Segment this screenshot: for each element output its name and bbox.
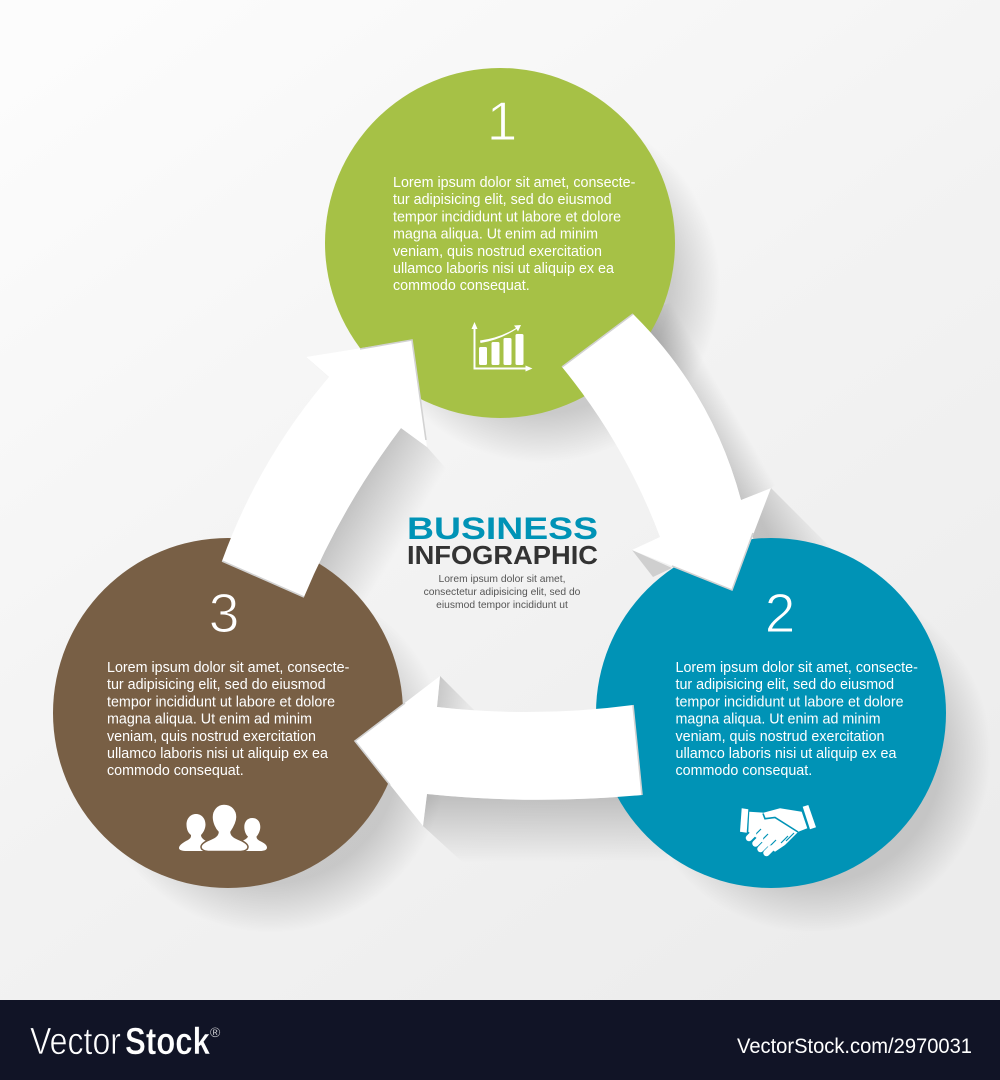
text block 1: ullamco laboris nisi ut aliquip ex ea — [393, 261, 614, 277]
arrow: step 3 to step 1 — [222, 340, 427, 597]
heading: business infographic: INFOGRAPHIC — [407, 540, 598, 570]
center text: consectetur adipisicing elit, sed do — [424, 587, 581, 598]
text block 1: commodo consequat. — [393, 278, 530, 294]
text block 2 — [676, 660, 918, 779]
text block 2: veniam, quis nostrud exercitation — [676, 729, 885, 745]
heading: business infographic: BUSINESS — [407, 510, 598, 546]
text block 2: commodo consequat. — [676, 763, 812, 779]
text block 1: tempor incididunt ut labore et dolore — [393, 209, 621, 225]
footer id: VectorStock.com/2970031 — [737, 1035, 972, 1058]
panel: step 1 green circle — [325, 68, 675, 418]
text block 2: tempor incididunt ut labore et dolore — [676, 694, 904, 710]
center text: Lorem ipsum dolor sit amet, — [438, 574, 566, 585]
text block 2: tur adipisicing elit, sed do eiusmod — [676, 677, 894, 693]
footer logo: Vector — [30, 1021, 121, 1063]
center text: eiusmod tempor incididunt ut — [436, 600, 568, 611]
text block 3: tur adipisicing elit, sed do eiusmod — [107, 677, 326, 693]
text block 3: veniam, quis nostrud exercitation — [107, 729, 316, 745]
text block 1: veniam, quis nostrud exercitation — [393, 244, 602, 260]
number 1: 1 — [487, 90, 517, 152]
text block 3: commodo consequat. — [107, 763, 244, 779]
panel: step 3 brown circle — [53, 538, 403, 888]
footer logo — [30, 1021, 221, 1063]
text block 3: magna aliqua. Ut enim ad minim — [107, 712, 312, 728]
text block 1: magna aliqua. Ut enim ad minim — [393, 227, 598, 243]
footer bar — [0, 1000, 1000, 1080]
arrow: step 1 to step 2 — [562, 314, 771, 590]
number 3: 3 — [209, 582, 239, 644]
text block 2: magna aliqua. Ut enim ad minim — [676, 712, 881, 728]
text block 3: Lorem ipsum dolor sit amet, consecte- — [107, 660, 350, 676]
heading: business infographic — [407, 510, 598, 570]
text block 3 — [107, 660, 350, 779]
panel: step 2 blue circle — [596, 538, 946, 888]
text block 2: ullamco laboris nisi ut aliquip ex ea — [676, 746, 896, 762]
icon: bar chart — [472, 322, 532, 372]
icon: people — [179, 804, 267, 852]
text block 1: tur adipisicing elit, sed do eiusmod — [393, 192, 612, 208]
text block 2: Lorem ipsum dolor sit amet, consecte- — [676, 660, 918, 676]
text block 1: Lorem ipsum dolor sit amet, consecte- — [393, 175, 636, 191]
icon: handshake — [740, 805, 816, 856]
text block 3: tempor incididunt ut labore et dolore — [107, 694, 335, 710]
center text — [424, 574, 581, 611]
arrow shadows — [304, 300, 835, 880]
arrow: step 2 to step 3 — [355, 676, 642, 826]
footer logo: Stock — [125, 1021, 211, 1063]
footer logo: ® — [210, 1024, 221, 1040]
circle shadows — [92, 107, 991, 933]
text block 1 — [393, 175, 636, 294]
number 2: 2 — [765, 582, 795, 644]
text block 3: ullamco laboris nisi ut aliquip ex ea — [107, 746, 328, 762]
